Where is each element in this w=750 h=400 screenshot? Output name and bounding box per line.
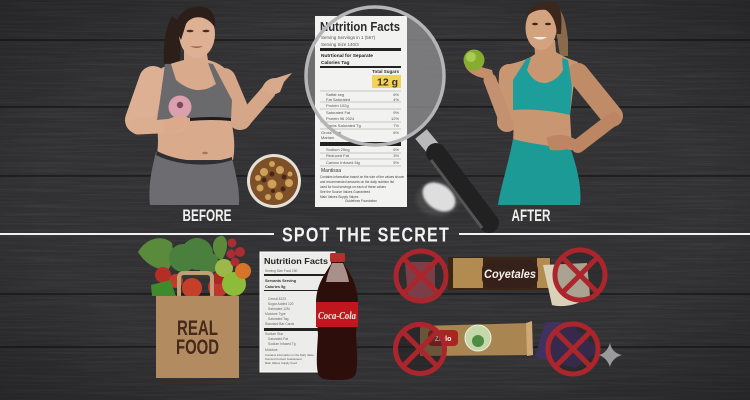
pointing hand [262,73,292,94]
nutrition label: small: Nutrition Facts [264,256,328,266]
nutrition label: main: Main Values Supply Values [320,195,359,199]
left upper arm [507,74,509,122]
nutrition label: small: Main Values Supply Used [265,361,297,365]
bag text: REAL [177,317,218,340]
nutrient rows: Protein 102g [326,103,349,108]
belly button [202,152,208,154]
divider line right [459,233,750,235]
teal sports bra [513,58,572,115]
nutrition label: small: Moisture [265,348,278,352]
leaves [138,238,173,270]
nutrition label: main: Contains information based on the size of the values shown [320,175,404,179]
cap [330,253,345,262]
nutrition label: main: Serving Servings in 1 (567) [321,35,376,40]
nutrition label: small: Contains information on the Daily Value [265,353,314,357]
figure: after woman [464,2,613,205]
nutrient rows: 4% [393,97,399,102]
nutrition label: small: Sodium Infused Tg [268,342,296,346]
real food bag: FOOD [176,336,219,359]
nutrition label: small: Standard Bar Cards [265,322,294,326]
neck highlight [326,263,349,282]
nutrient rows: Satfat seg [326,92,344,97]
hair top [176,7,215,40]
face features [186,30,210,48]
collar [421,134,436,152]
handle [436,153,489,223]
left forearm [138,124,178,126]
nutrient rows: 9% [393,110,399,115]
red label [316,302,358,327]
right forearm [578,119,613,146]
nutrient rows: Protein 96 2024 [326,116,355,121]
nutrition label: small: Sourced Content Guaranteed [265,357,302,361]
ponytail [556,6,568,56]
leggings waistband [156,151,232,165]
tomatoes and produce [151,267,228,298]
pale wrapper item [543,263,590,306]
label: BEFORE: BEFORE [182,207,232,225]
nutrition label: main: Serving Size 140/3 [321,42,359,47]
nutrition label: small: Saturated 12M [268,307,290,311]
heading: Nutrition Facts [320,20,400,34]
berries [226,238,245,266]
nutrition label: small: Sugar Added 120 [268,302,294,306]
nutrition label: small: Cereal 8123 [268,297,286,301]
nutrient rows: Saturated Fat [326,110,351,115]
no sign bottom right [548,324,598,374]
nutrition label: main: Total Sugars [372,69,399,74]
divider line left [0,233,274,235]
nutrient rows: Carbs Saturated Tg [326,123,361,128]
highlighted sugar value: 12 g [377,76,398,88]
magnifying glass [300,0,489,228]
lens right grey [407,17,442,135]
nutrient rows: 12% [391,116,399,121]
nutrition label: small: Saturated Fat [268,337,288,341]
sparkle [599,343,622,367]
candy wrapper item [535,322,600,368]
nutrition label: small: Moisture Type [265,312,286,316]
lens left crescent [308,46,315,106]
nutrition label: main: Guidelines Foundation [345,199,377,203]
label: AFTER: AFTER [512,207,551,225]
nutrition label: small: Calories 5g [265,285,286,289]
brand: Coyetales [484,269,536,281]
nutrient rows: Carbon Infused 5ig [326,160,360,165]
nutrient rows: 3% [393,153,399,158]
neck and torso skin [510,40,578,150]
nutrient rows: Reduced Fat [326,153,350,158]
left forearm [490,80,507,125]
nutrient rows: 7% [393,123,399,128]
nutrition label: main [315,16,407,207]
nutrient rows [321,92,399,165]
paper bag [156,296,239,378]
green apple [464,50,484,70]
face features [532,23,551,40]
wrapper brand: Ziplo [435,336,451,343]
nutrition label: main: Calories Tag [321,60,350,66]
rim [306,7,444,145]
left upper arm [139,80,153,120]
title: SPOT THE SECRET [282,224,450,246]
nutrition label: small [260,252,335,372]
no sign bottom left [396,324,444,374]
salt pile [416,176,461,218]
nutrient rows: 6% [393,147,399,152]
broccoli [169,238,219,274]
nutrient rows: 5% [393,160,399,165]
figure: before woman [138,7,292,205]
ponytail [164,16,182,64]
nutrition label: main: and recommended amounts on the daily nutrition list [320,180,394,184]
hair top [526,2,561,34]
nutrient rows: Mariam [321,135,335,140]
nutrient rows: Fat Saturated [326,97,350,102]
no sign top right [555,250,605,300]
nutrition label: small: Servants Serving [265,279,297,283]
hand on hip [546,135,582,150]
bowl of nuts [247,154,301,208]
vegetables [138,236,251,298]
nutrition label: main: Nutrtional for Separate [321,53,373,59]
nutrient rows: 6% [393,92,399,97]
no sign top left [396,251,446,301]
right upper arm [224,80,240,118]
nutrition label: small: Serving Size Food 150 [265,269,297,273]
hand holding apple [465,64,494,78]
hand on donut [163,116,188,133]
nutrition label: main: See the Source Values Guaranteed [320,190,370,194]
nutrition label: small: Sodium Star [265,332,284,336]
right upper arm [578,74,612,116]
wrapper pink item [405,262,435,300]
teal shorts [498,139,581,205]
nutrient rows: Gross Total [321,130,341,135]
donut [168,96,192,118]
torso skin [150,48,234,160]
head [179,10,215,58]
brand name: Coca-Cola [318,311,356,322]
nutrient rows: 6% [393,130,399,135]
real food bag [138,236,251,378]
apples and oranges [215,259,251,296]
bra band [190,117,231,121]
nutrition label: main: used for food servings on each of these values [320,185,386,189]
highlighted sugar value [372,75,401,88]
nutrient rows: Sodium 25ng [326,147,350,152]
right forearm [242,92,268,122]
cola bottle [316,253,358,380]
granola bar: Coyetales [448,257,551,290]
grey leggings [149,152,239,205]
nutrition label: small: Saturated Tag [268,317,289,321]
granola bar: green badge [420,321,533,356]
handle highlight [431,160,482,228]
bag handle [179,273,212,296]
head [526,6,556,50]
grey sports bra [157,63,232,120]
nutrition label: main: Mantissa [321,168,341,174]
